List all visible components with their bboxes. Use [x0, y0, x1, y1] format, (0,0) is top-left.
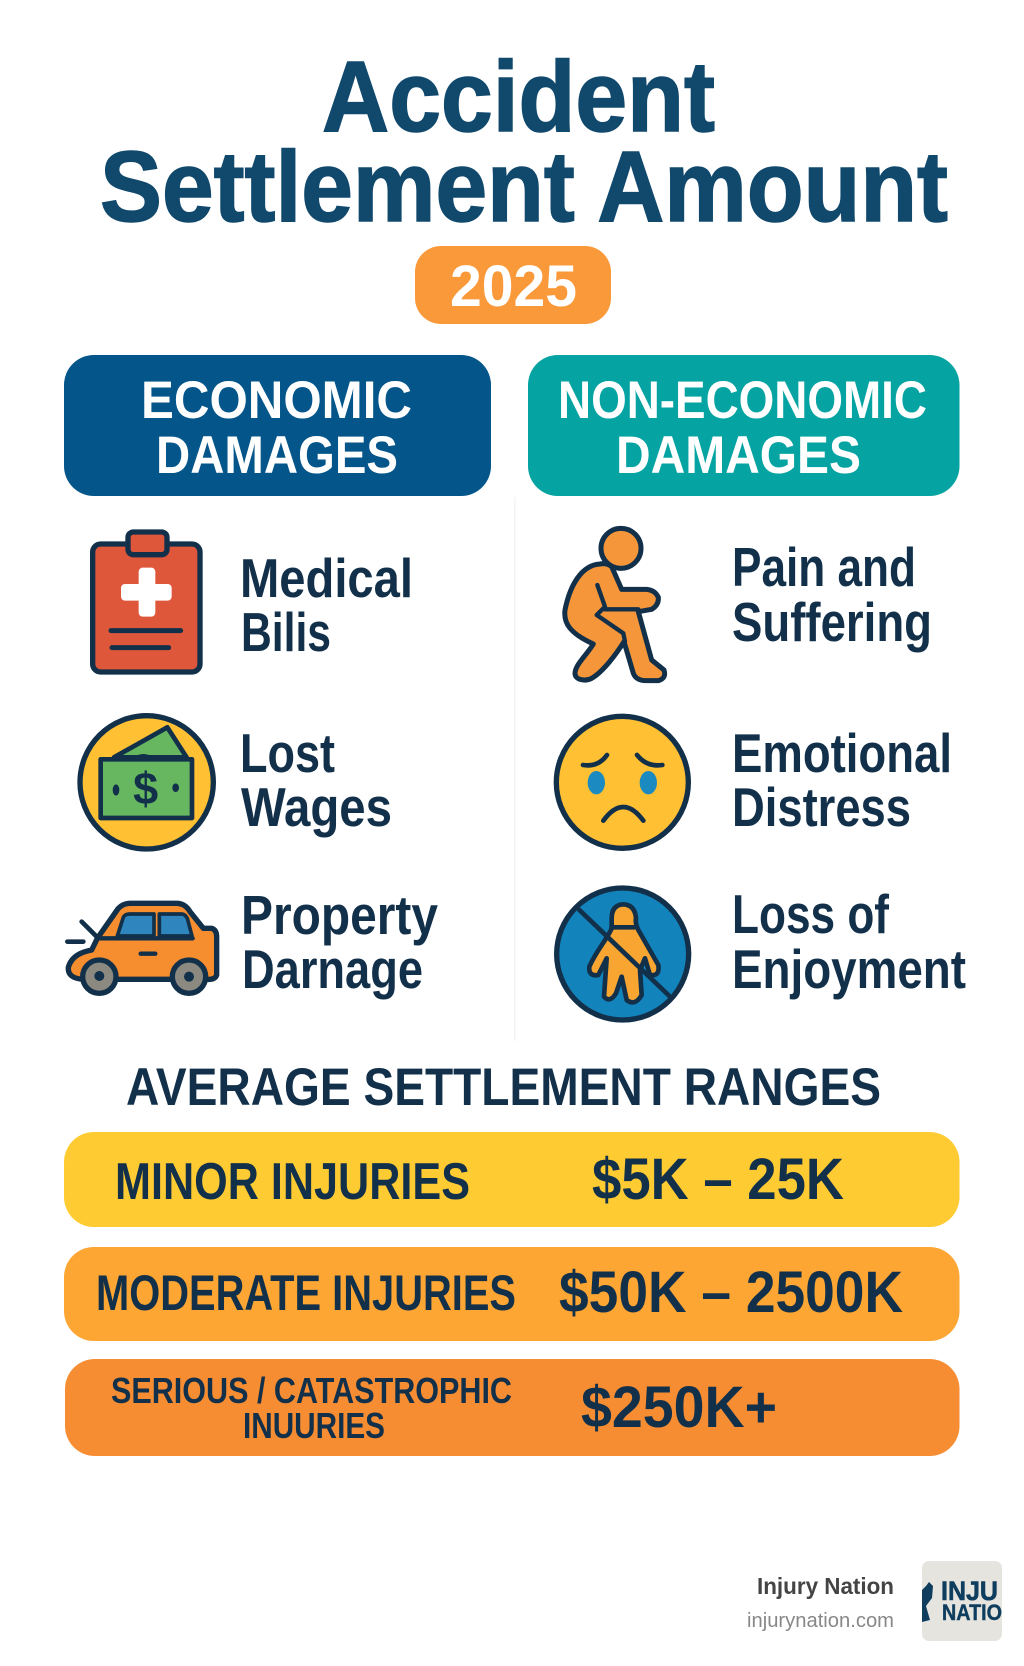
year badge: [415, 246, 611, 324]
label: medical bills: Bilis: [241, 601, 331, 663]
bar: moderate injuries: MODERATE INJURIES: [96, 1265, 516, 1321]
label: loss of enjoyment: [732, 883, 966, 1000]
header: economic damages: ECONOMIC: [141, 371, 412, 430]
label: pain and suffering: [732, 536, 932, 653]
year badge: 2025: [450, 254, 577, 319]
bar: moderate injuries: $50K – 2500K: [559, 1260, 903, 1325]
label: emotional distress: Emotional: [732, 722, 952, 784]
label: pain and suffering: Pain and: [732, 536, 916, 598]
icon: cash in circle: [80, 716, 213, 849]
title: Accident: [322, 41, 715, 153]
header: economic damages: [64, 355, 491, 496]
header: non-economic damages: [528, 355, 960, 496]
label: property damage: Darnage: [242, 938, 423, 1000]
label: medical bills: Medical: [240, 547, 413, 609]
label: loss of enjoyment: Enjoyment: [732, 938, 966, 1000]
footer: logo: [922, 1561, 1002, 1641]
label: loss of enjoyment: Loss of: [732, 883, 890, 945]
icon: person in pain: [565, 528, 665, 681]
bar: minor injuries: $5K – 25K: [592, 1147, 844, 1212]
heading: average settlement ranges: AVERAGE SETTLEMENT RANGES: [126, 1058, 881, 1117]
icon: damaged car: [67, 903, 217, 993]
label: property damage: Property: [241, 884, 438, 946]
title: Settlement Amount: [100, 131, 948, 243]
bar: serious or catastrophic injuries: [65, 1359, 960, 1456]
footer: brand name and url: injurynation.com: [747, 1610, 894, 1632]
header: non-economic damages: DAMAGES: [616, 426, 861, 485]
label: property damage: [241, 884, 438, 1000]
bar: serious or catastrophic injuries: $250K+: [581, 1375, 777, 1440]
icon: crossed-out person: [557, 888, 689, 1020]
bar: serious or catastrophic injuries: SERIOUS / CATASTROPHIC: [111, 1370, 512, 1411]
label: lost wages: Lost: [240, 722, 335, 784]
icon: crying face: [556, 716, 688, 848]
label: lost wages: [240, 722, 392, 838]
header: non-economic damages: NON-ECONOMIC: [558, 371, 927, 430]
bar: minor injuries: [64, 1132, 960, 1227]
bar: minor injuries: MINOR INJURIES: [115, 1153, 470, 1211]
footer: logo: NATIO: [942, 1600, 1002, 1625]
label: lost wages: Wages: [241, 776, 392, 838]
footer: brand name and url: [747, 1573, 894, 1632]
label: medical bills: [240, 547, 413, 663]
title: [100, 41, 948, 243]
bar: moderate injuries: [64, 1247, 960, 1341]
bar: serious or catastrophic injuries: INUURIES: [243, 1405, 385, 1446]
label: emotional distress: Distress: [732, 776, 911, 838]
footer: logo: INJU: [941, 1576, 998, 1606]
label: pain and suffering: Suffering: [732, 591, 932, 653]
icon: cash in circle: $: [133, 763, 158, 814]
icon: medical clipboard: [93, 532, 200, 672]
header: economic damages: DAMAGES: [156, 426, 398, 485]
footer: brand name and url: Injury Nation: [757, 1573, 894, 1599]
label: emotional distress: [732, 722, 952, 838]
